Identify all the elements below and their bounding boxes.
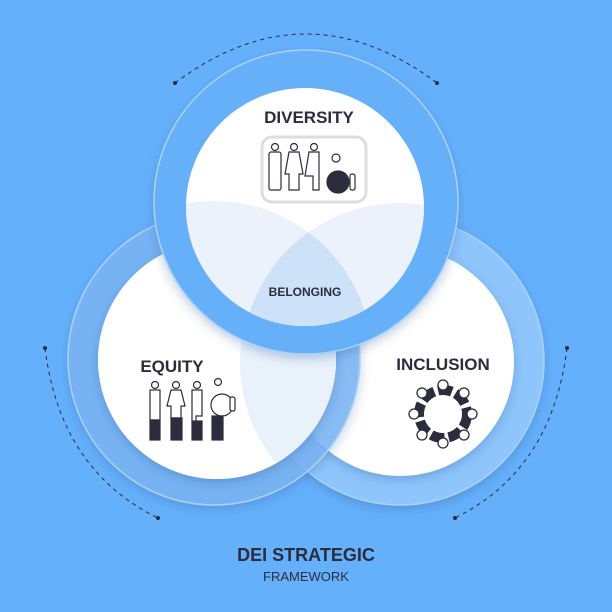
- heading: diversity: DIVERSITY: [264, 108, 355, 127]
- arrow: right dashed arc: [453, 346, 569, 520]
- title: [237, 545, 375, 584]
- arrow: top dashed arc: [173, 34, 439, 85]
- heading: inclusion: INCLUSION: [396, 355, 490, 374]
- panel: diversity circle: [150, 49, 462, 364]
- panel: equity circle: [65, 224, 366, 512]
- title: FRAMEWORK: [263, 569, 349, 584]
- icon: equity people on blocks: [150, 378, 235, 440]
- panel: inclusion circle: [256, 217, 544, 505]
- heading: equity: EQUITY: [140, 357, 204, 376]
- text: belonging: BELONGING: [269, 285, 341, 299]
- title: DEI STRATEGIC: [237, 545, 375, 565]
- icon: inclusion circle of people: [409, 380, 477, 448]
- icon: diversity people: [262, 137, 366, 202]
- arrow: left dashed arc: [43, 346, 160, 520]
